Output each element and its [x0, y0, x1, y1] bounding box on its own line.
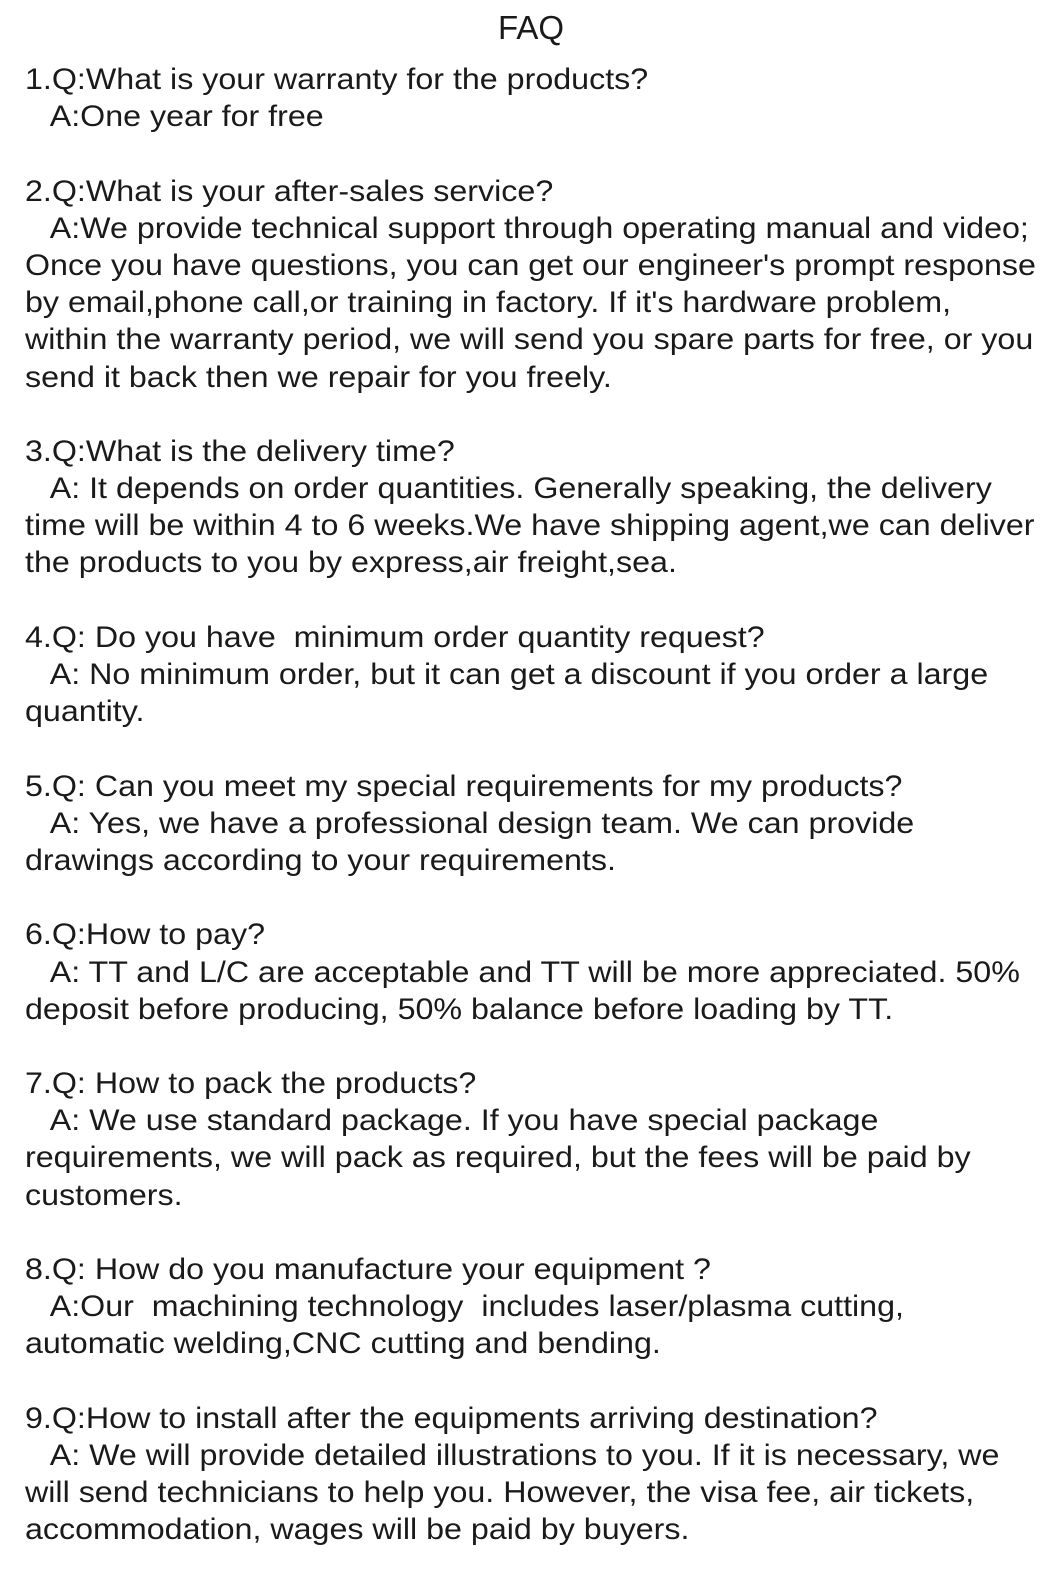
faq 3: the products to you by express,air freight,sea.	[25, 546, 677, 579]
faq 1: A:One year for free	[50, 100, 324, 133]
faq 5: 5.Q: Can you meet my special requirements for my products?	[25, 770, 902, 803]
faq 4: A: No minimum order, but it can get a discount if you order a large	[50, 658, 988, 691]
faq 7: customers.	[25, 1179, 183, 1212]
faq 4: 4.Q: Do you have minimum order quantity request?	[25, 621, 765, 654]
faq 9	[25, 1402, 999, 1546]
faq 9: will send technicians to help you. However, the visa fee, air tickets,	[25, 1476, 974, 1509]
faq 2	[25, 175, 1036, 394]
faq 3: time will be within 4 to 6 weeks.We have shipping agent,we can deliver	[25, 509, 1035, 542]
faq 7: 7.Q: How to pack the products?	[25, 1067, 476, 1100]
faq 9: 9.Q:How to install after the equipments arriving destination?	[25, 1402, 878, 1435]
title: FAQ	[498, 9, 564, 46]
faq 8: 8.Q: How do you manufacture your equipment ?	[25, 1253, 711, 1286]
faq 2: A:We provide technical support through operating manual and video;	[50, 212, 1029, 245]
faq 2: by email,phone call,or training in factory. If it's hardware problem,	[25, 286, 951, 319]
faq 3	[25, 435, 1035, 579]
faq 5: drawings according to your requirements.	[25, 844, 616, 877]
faq 5	[25, 770, 914, 877]
faq 2: Once you have questions, you can get our engineer's prompt response	[25, 249, 1036, 282]
faq 1	[25, 63, 648, 133]
faq 8: A:Our machining technology includes laser/plasma cutting,	[50, 1290, 904, 1323]
faq 9: A: We will provide detailed illustrations to you. If it is necessary, we	[50, 1439, 999, 1472]
faq 6: A: TT and L/C are acceptable and TT will be more appreciated. 50%	[50, 956, 1020, 988]
faq 7: requirements, we will pack as required, but the fees will be paid by	[25, 1141, 971, 1174]
faq 9: accommodation, wages will be paid by buyers.	[25, 1513, 689, 1546]
faq 8: automatic welding,CNC cutting and bending.	[25, 1327, 661, 1360]
faq 5: A: Yes, we have a professional design team. We can provide	[50, 807, 914, 840]
faq 7: A: We use standard package. If you have special package	[50, 1104, 878, 1137]
faq 3: 3.Q:What is the delivery time?	[25, 435, 455, 468]
faq 4	[25, 621, 988, 728]
faq 6: 6.Q:How to pay?	[25, 918, 265, 951]
faq 3: A: It depends on order quantities. Generally speaking, the delivery	[50, 472, 992, 505]
faq 2: 2.Q:What is your after-sales service?	[25, 175, 553, 208]
faq 2: send it back then we repair for you freely.	[25, 360, 612, 394]
faq 6: deposit before producing, 50% balance before loading by TT.	[25, 993, 893, 1026]
faq 8	[25, 1253, 904, 1360]
faq 1: 1.Q:What is your warranty for the products?	[25, 63, 648, 96]
faq 6	[25, 918, 1020, 1026]
faq 7	[25, 1067, 971, 1212]
faq 2: within the warranty period, we will send you spare parts for free, or you	[25, 323, 1033, 356]
faq 4: quantity.	[25, 695, 144, 728]
